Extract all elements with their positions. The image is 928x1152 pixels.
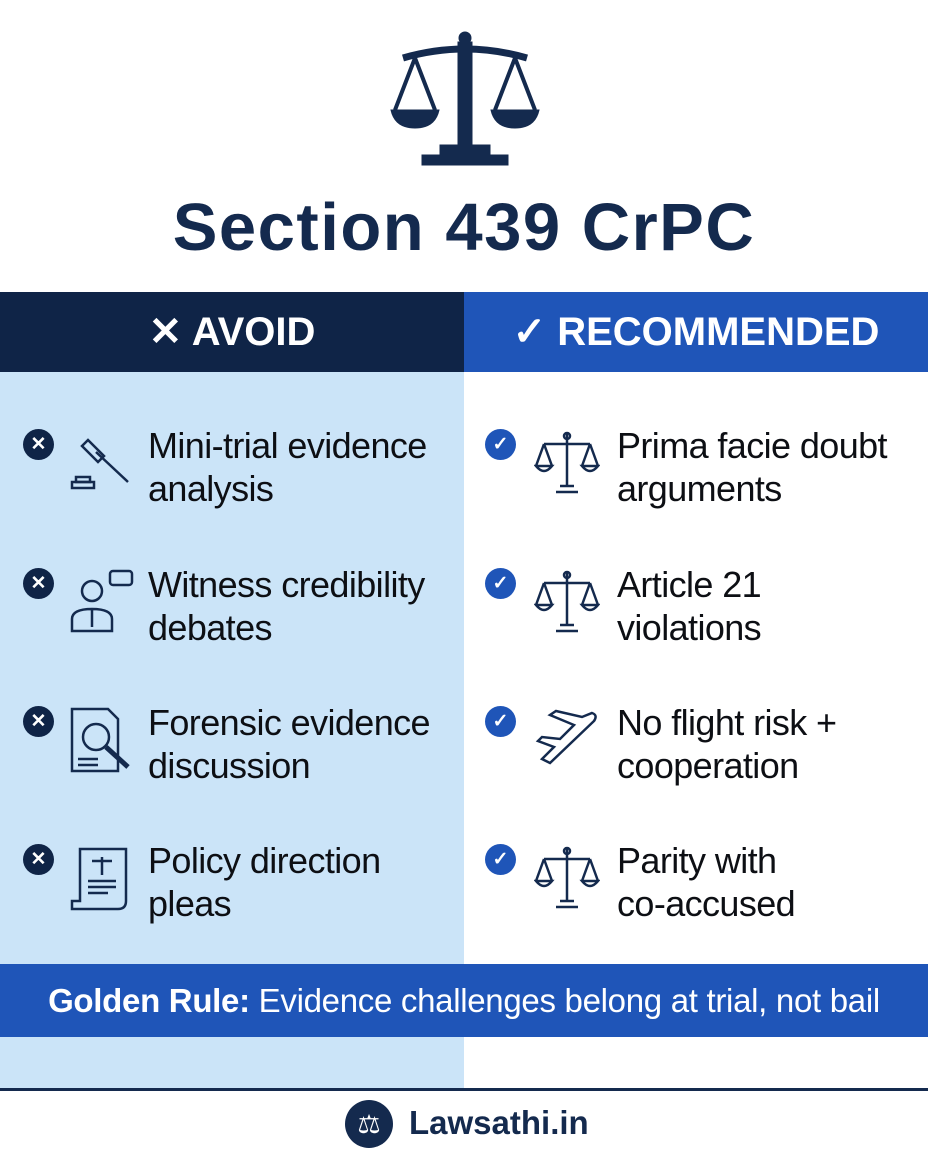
recommended item 2: Article 21 — [617, 564, 761, 605]
icon: scales of justice — [390, 32, 540, 166]
recommended item 1 — [485, 425, 888, 509]
avoid item 1: analysis — [148, 468, 273, 509]
avoid item 2: debates — [148, 607, 272, 648]
recommended item 4 — [485, 840, 795, 924]
header: avoid — [0, 292, 464, 372]
icon: policy scroll — [70, 848, 128, 910]
golden rule banner: Golden Rule: Evidence challenges belong at trial, not bail — [48, 982, 880, 1019]
background: left column — [0, 372, 464, 1089]
recommended item 2 — [485, 564, 761, 648]
avoid item 4: pleas — [148, 883, 231, 924]
footer logo: Lawsathi.in — [409, 1104, 589, 1141]
icon: scales — [534, 432, 600, 494]
recommended item 3 — [485, 702, 836, 786]
recommended item 4: Parity with — [617, 840, 776, 881]
avoid item 3 — [23, 702, 430, 786]
recommended item 3: ✓ — [493, 711, 508, 732]
avoid item 3: discussion — [148, 745, 310, 786]
avoid item 1 — [23, 425, 427, 509]
icon: airplane — [536, 710, 597, 764]
header: recommended — [464, 292, 928, 372]
icon: witness — [70, 570, 134, 632]
avoid item 4: Policy direction — [148, 840, 381, 881]
icon: scales — [534, 846, 600, 908]
footer logo — [345, 1100, 589, 1148]
recommended item 3: cooperation — [617, 745, 799, 786]
recommended item 1: ✓ — [493, 434, 508, 455]
avoid item 1: Mini-trial evidence — [148, 425, 427, 466]
avoid item 2: ✕ — [31, 573, 46, 594]
recommended item 2: violations — [617, 607, 761, 648]
icon: scales — [534, 570, 600, 632]
avoid item 2: Witness credibility — [148, 564, 425, 605]
avoid item 2 — [23, 564, 426, 648]
avoid item 3: ✕ — [31, 711, 46, 732]
recommended item 1: arguments — [617, 468, 782, 509]
avoid item 4: ✕ — [31, 849, 46, 870]
golden rule banner — [0, 964, 928, 1037]
recommended item 2: ✓ — [493, 573, 508, 594]
recommended item 3: No flight risk + — [617, 702, 836, 743]
recommended item 1: Prima facie doubt — [617, 425, 887, 466]
header: recommended: ✓ RECOMMENDED — [513, 310, 879, 354]
recommended item 4: ✓ — [493, 849, 508, 870]
icon: gavel — [70, 438, 129, 490]
icon: forensic document — [70, 708, 130, 772]
header: avoid: ✕ AVOID — [149, 310, 315, 354]
avoid item 4 — [23, 840, 381, 924]
avoid item 1: ✕ — [31, 434, 46, 455]
title: Section 439 CrPC — [173, 190, 755, 265]
avoid item 3: Forensic evidence — [148, 702, 430, 743]
footer logo: ⚖ — [357, 1109, 381, 1139]
recommended item 4: co-accused — [617, 883, 795, 924]
